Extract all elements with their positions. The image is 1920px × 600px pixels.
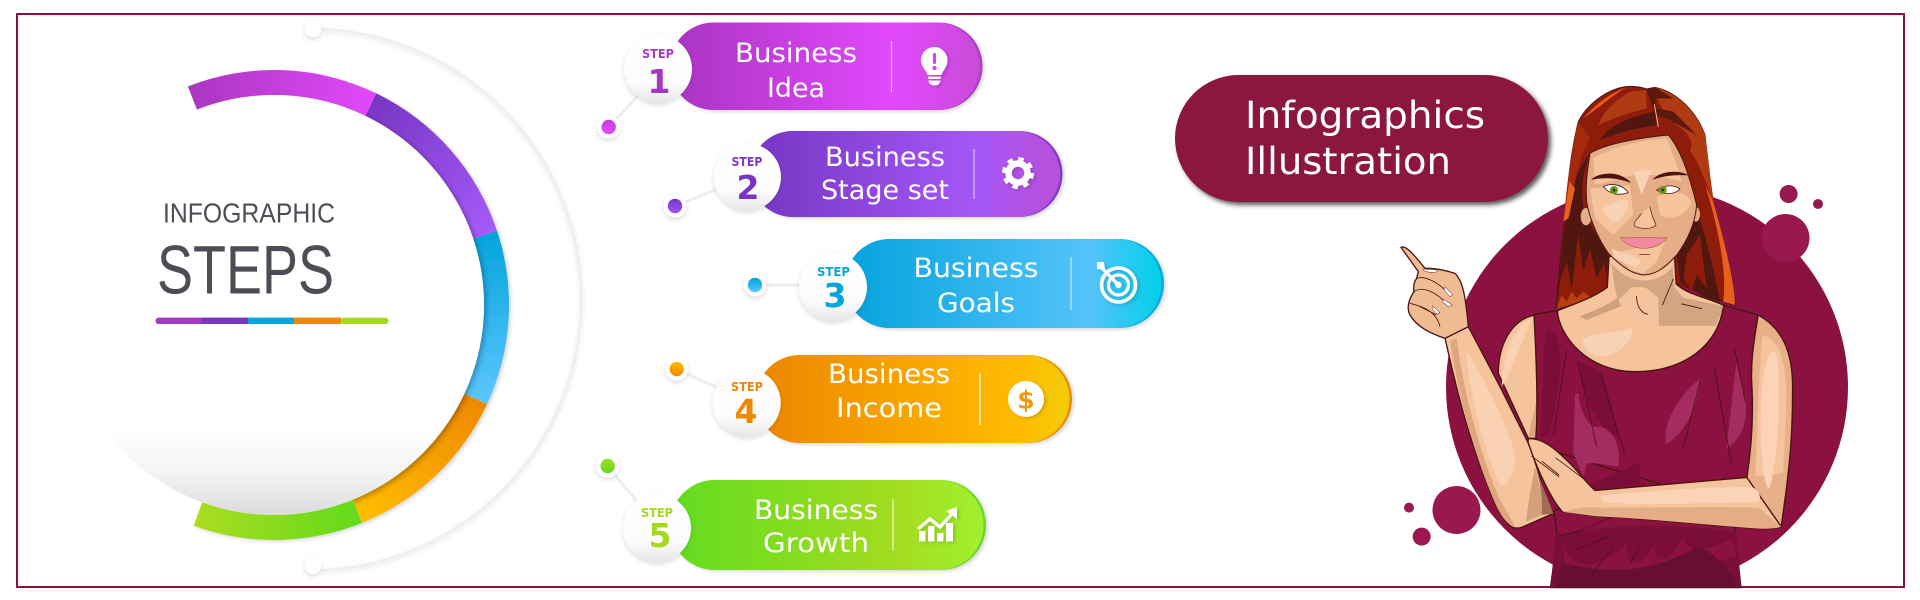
- connector and dot: [597, 88, 645, 138]
- step badge: [714, 144, 781, 210]
- raised arm and pointing hand: [1401, 247, 1553, 528]
- step badge: STEP: [731, 380, 763, 394]
- label: Goals: [937, 288, 1015, 319]
- ring segments: [188, 70, 509, 540]
- label: [821, 142, 949, 206]
- label: [754, 495, 878, 559]
- step badge: [624, 35, 692, 103]
- heading: steps: STEPS: [157, 232, 334, 308]
- decorative dots: [1404, 185, 1823, 546]
- pill: [756, 355, 1072, 443]
- connector and dot: [664, 187, 722, 218]
- label: Stage set: [821, 175, 949, 206]
- pill: [845, 239, 1164, 328]
- step badge: STEP: [817, 265, 850, 279]
- face: [1581, 135, 1700, 275]
- dress folds left: [1540, 330, 1640, 577]
- neck and chest: [1557, 256, 1723, 372]
- icon: growth chart: [918, 507, 957, 542]
- step 4: [665, 355, 1072, 443]
- illustration: woman pointing: [1401, 86, 1793, 588]
- outer decorative arc with end knobs: [304, 20, 581, 574]
- icon: gear: [1004, 160, 1032, 186]
- step badge: [623, 494, 691, 562]
- label: Business: [735, 38, 857, 69]
- step badge: STEP: [641, 506, 673, 520]
- label: Business: [825, 142, 945, 173]
- step badge: [713, 369, 781, 437]
- callout: title pill: Infographics: [1245, 94, 1485, 137]
- label: Business: [828, 359, 950, 390]
- dress: [1534, 305, 1758, 588]
- colour underline: [156, 318, 388, 324]
- right upper arm: [1747, 315, 1793, 527]
- step badge: STEP: [732, 155, 763, 169]
- step badge: [799, 253, 867, 321]
- pill: [670, 22, 982, 110]
- step 1: [597, 22, 982, 138]
- connector and dot: [744, 274, 805, 296]
- step badge: 2: [737, 168, 759, 207]
- label: Growth: [763, 528, 869, 559]
- connector and dot: [665, 358, 725, 391]
- connector and dot: [596, 454, 640, 505]
- step badge: STEP: [642, 47, 674, 61]
- pill: [750, 131, 1062, 217]
- icon: dollar: $: [1017, 386, 1035, 414]
- panel: steps ring: [133, 70, 512, 543]
- step badge: 1: [648, 62, 670, 101]
- hair: [1556, 86, 1735, 308]
- arm highlights: [1600, 351, 1779, 504]
- centre disc: [64, 95, 484, 515]
- label: Business: [914, 253, 1038, 284]
- step badge: 5: [649, 516, 671, 555]
- step 3: [744, 239, 1164, 328]
- label: Idea: [767, 73, 825, 104]
- folded forearm and hand: [1528, 439, 1781, 529]
- illustration backdrop circle: [1446, 186, 1848, 588]
- label: Income: [836, 393, 942, 424]
- label: [828, 359, 950, 424]
- callout: title pill: Illustration: [1245, 140, 1451, 183]
- step 2: [664, 131, 1062, 218]
- label: [914, 253, 1038, 319]
- upper arm left: [1498, 315, 1539, 438]
- step 5: [596, 454, 986, 570]
- heading: infographic: INFOGRAPHIC: [163, 198, 335, 228]
- step badge: 4: [735, 392, 757, 431]
- label: Business: [754, 495, 878, 526]
- icon: light bulb: [921, 47, 948, 86]
- step badge: 3: [824, 276, 846, 315]
- icon: target: [1097, 262, 1136, 302]
- callout: title pill: [1175, 75, 1548, 202]
- pill: [670, 480, 986, 570]
- label: [735, 38, 857, 104]
- icon: dollar: [1008, 381, 1044, 417]
